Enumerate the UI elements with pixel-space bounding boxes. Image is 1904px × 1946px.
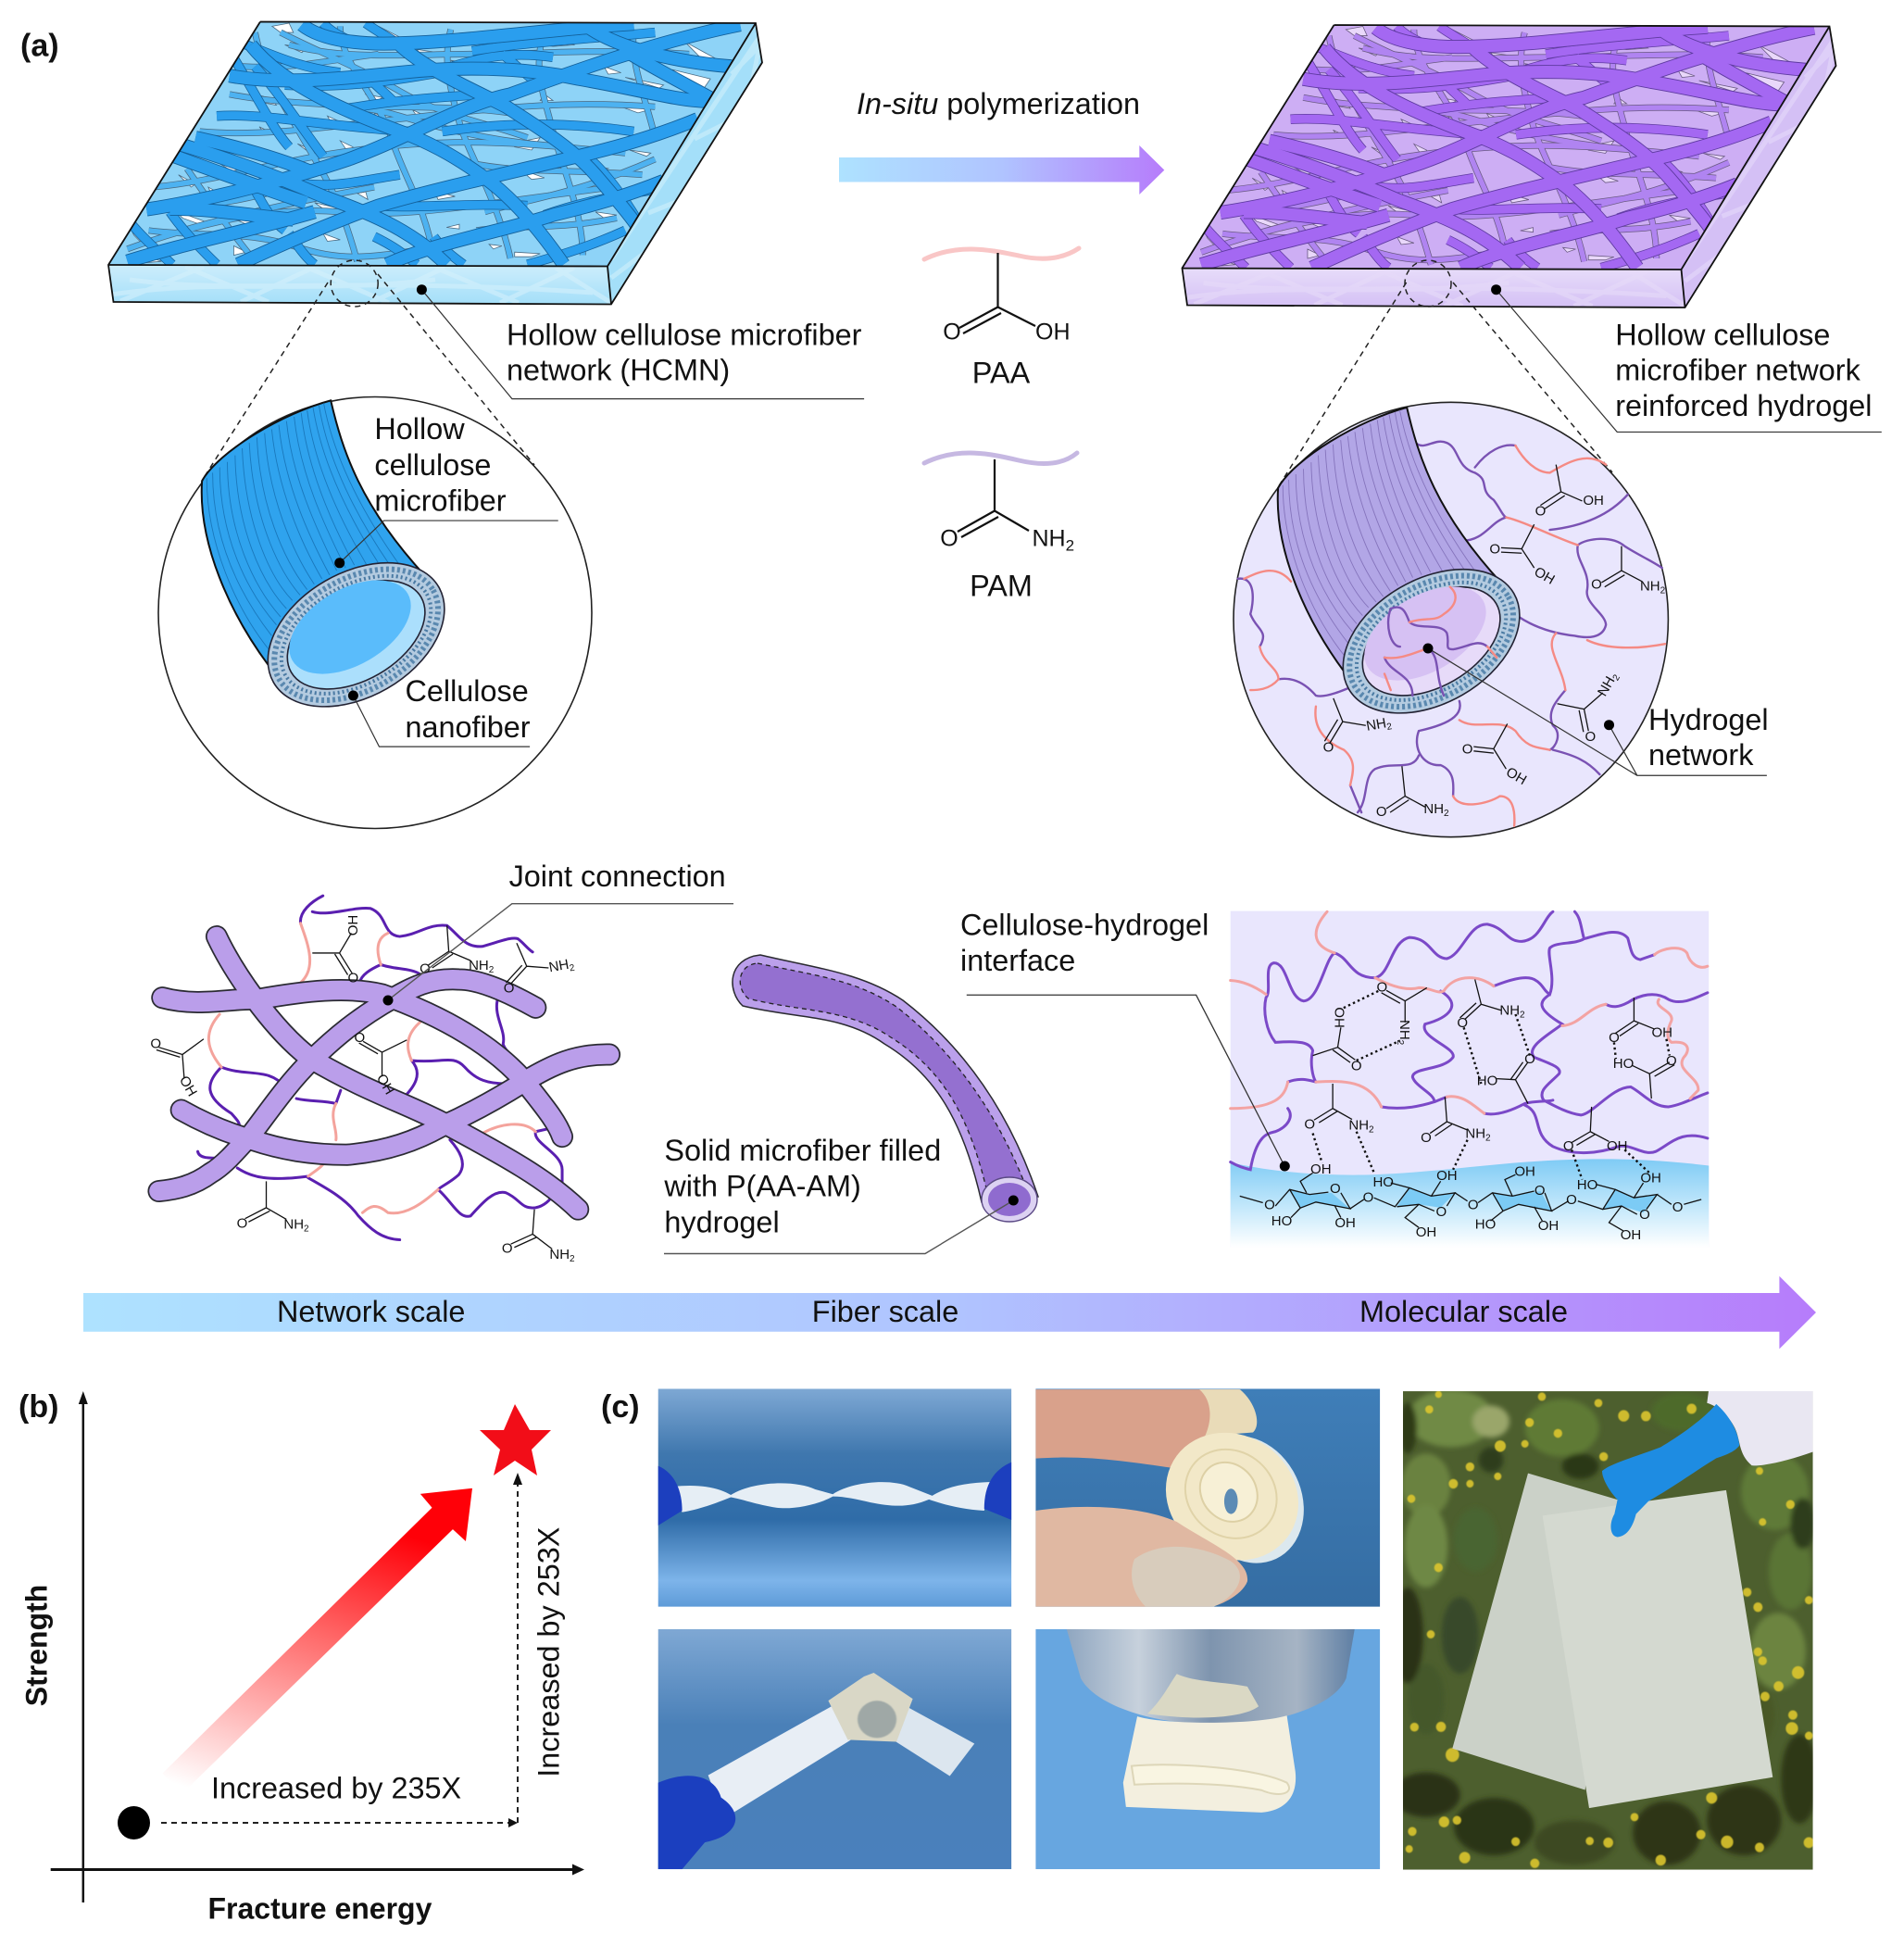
molecular labels: 2 xyxy=(1485,1134,1491,1143)
label: increased by 235X: Increased by 235X xyxy=(211,1772,461,1805)
molecular labels: O xyxy=(1376,980,1387,996)
chemical side groups: OH xyxy=(345,915,361,935)
molecular labels: O xyxy=(1351,1058,1362,1073)
chemical side groups in circle: O xyxy=(1376,804,1387,820)
molecular labels: O xyxy=(1330,1181,1341,1197)
chemical side groups in circle: O xyxy=(1585,729,1596,745)
molecular labels: HO xyxy=(1477,1073,1497,1088)
y axis xyxy=(79,1391,88,1902)
purple fibers xyxy=(158,936,609,1210)
start dot xyxy=(118,1806,150,1839)
monomer: PAM: PAM xyxy=(970,570,1033,603)
chemical side groups in circle: 2 xyxy=(1444,809,1449,819)
leader dot: HCMN xyxy=(417,284,427,295)
molecular labels: HO xyxy=(1271,1213,1292,1229)
blue slab: hollow cellulose microfiber network xyxy=(102,14,783,304)
chemical side groups: O xyxy=(420,961,431,977)
panel background xyxy=(1231,911,1709,1248)
hydrogel chains behind fibers xyxy=(198,896,562,1240)
chemical side groups in circle: NH xyxy=(1595,674,1618,699)
chemical side groups in circle: O xyxy=(1489,542,1500,558)
label: reinforced hydrogel: reinforced hydrogel xyxy=(1615,389,1872,422)
chemical side groups: O xyxy=(354,1030,365,1046)
chemical side groups xyxy=(150,915,576,1264)
photo: folded joint xyxy=(658,1629,1011,1869)
molecular labels: O xyxy=(1672,1199,1683,1215)
label: reinforced hydrogel: Hollow cellulose xyxy=(1615,319,1830,352)
magnified circle: hollow fiber xyxy=(158,396,592,828)
molecular labels: OH xyxy=(1538,1218,1559,1234)
fiber body xyxy=(1278,408,1501,672)
label: solid microfiber: Solid microfiber filled xyxy=(664,1134,941,1167)
chemical side groups: NH xyxy=(469,958,489,973)
leader dot: microfiber xyxy=(1008,1195,1019,1206)
hydrogel chains xyxy=(1231,911,1708,1170)
chemical side groups in circle: OH xyxy=(1583,493,1604,508)
cellulose backbone xyxy=(1240,1173,1701,1231)
monomer: PAA xyxy=(924,248,1079,390)
molecular labels: HO xyxy=(1332,1007,1348,1028)
monomer: PAA: PAA xyxy=(972,357,1031,390)
molecular labels: OH xyxy=(1514,1164,1535,1180)
label: cellulose-hydrogel interface: interface xyxy=(960,944,1075,977)
label: fiber scale: Fiber scale xyxy=(812,1295,958,1328)
chemical side groups: OH xyxy=(176,1073,200,1099)
chemical side groups in circle: NH xyxy=(1640,578,1660,595)
molecular labels: O xyxy=(1566,1192,1577,1208)
chemical side groups: NH xyxy=(283,1217,304,1233)
microfiber end core xyxy=(988,1183,1031,1216)
leader: joint connection xyxy=(388,904,733,1000)
chemical side groups: NH xyxy=(549,1247,570,1262)
molecular labels: O xyxy=(1457,1015,1468,1031)
purple slab: reinforced hydrogel xyxy=(1176,17,1857,308)
photo: hand holding sheets outdoors xyxy=(1392,1389,1818,1870)
glucose rings xyxy=(1290,1187,1657,1212)
leader lines: upper right xyxy=(1428,290,1882,775)
molecular labels: O xyxy=(1563,1138,1574,1154)
chemical side groups: 2 xyxy=(569,963,576,974)
molecular labels: OH xyxy=(1334,1215,1356,1231)
monomer: PAM xyxy=(924,453,1077,603)
chemical side groups in circle: 2 xyxy=(1386,722,1393,733)
chemical side groups: 2 xyxy=(304,1224,309,1235)
molecular labels: 2 xyxy=(1369,1125,1374,1136)
label: network scale: Network scale xyxy=(277,1295,465,1328)
leader dot: interface xyxy=(1280,1161,1290,1171)
monomer: PAM: O xyxy=(940,526,958,552)
label: in-situ polymerization: In-situ polymerization xyxy=(857,87,1140,120)
molecular labels: NH xyxy=(1348,1118,1369,1134)
label: hollow cellulose microfiber: cellulose xyxy=(374,448,491,482)
zoom guides: blue xyxy=(202,260,534,481)
photo: twisted ribbon xyxy=(658,1388,1011,1607)
photo: rolled sheet xyxy=(1035,1388,1380,1607)
monomer: PAA: OH xyxy=(1035,320,1071,345)
molecular labels: NH xyxy=(1465,1126,1485,1141)
molecular labels: OH xyxy=(1621,1227,1641,1243)
label: hollow cellulose microfiber: microfiber xyxy=(374,483,507,517)
microfiber end cap xyxy=(982,1177,1037,1222)
label: (a): (a) xyxy=(20,28,59,63)
molecular labels: OH xyxy=(1651,1025,1672,1041)
label: cellulose nanofiber: nanofiber xyxy=(406,710,531,744)
molecular labels: HO xyxy=(1372,1174,1394,1190)
monomer: PAM: NH xyxy=(1032,526,1066,552)
molecular labels: O xyxy=(1666,1053,1677,1069)
chemical side groups in circle: NH xyxy=(1365,715,1387,734)
circle outline xyxy=(1234,402,1668,837)
molecular labels: O xyxy=(1639,1207,1650,1223)
label: HCMN: network (HCMN) xyxy=(507,354,730,387)
molecular labels: OH xyxy=(1607,1138,1627,1154)
arrow: polymerization xyxy=(839,145,1164,195)
monomer: PAM: 2 xyxy=(1066,537,1074,555)
molecular labels: HO xyxy=(1613,1056,1634,1072)
label: reinforced hydrogel: microfiber network xyxy=(1615,354,1861,387)
molecular labels: OH xyxy=(1416,1224,1436,1240)
label: joint connection: Joint connection xyxy=(509,860,726,893)
x axis xyxy=(51,1864,584,1875)
chemical side groups: 2 xyxy=(570,1254,575,1264)
molecular labels: O xyxy=(1421,1130,1432,1146)
leader dot: joint xyxy=(383,995,393,1006)
chemical side groups in circle: NH xyxy=(1423,801,1444,817)
chemical side groups: O xyxy=(347,971,358,986)
chemical side groups in circle: O xyxy=(1462,741,1472,758)
molecular labels: O xyxy=(1468,1197,1479,1212)
chemical side groups: OH xyxy=(373,1072,397,1098)
chemical side groups: O xyxy=(150,1036,161,1051)
leader: cellulose-hydrogel interface xyxy=(967,995,1284,1166)
leader lines: upper left xyxy=(340,290,864,747)
magnified circle: hydrogel reinforced fiber xyxy=(1234,402,1668,837)
molecular labels: OH xyxy=(1310,1161,1332,1177)
monomer: PAA: O xyxy=(943,320,961,345)
label: solid microfiber: hydrogel xyxy=(664,1206,780,1239)
axis label: strength: Strength xyxy=(20,1585,54,1706)
label: cellulose nanofiber: Cellulose xyxy=(406,674,529,708)
molecular labels: NH xyxy=(1499,1003,1520,1019)
label: hollow cellulose microfiber: Hollow xyxy=(374,412,465,446)
label: (b): (b) xyxy=(19,1389,58,1425)
molecular labels: O xyxy=(1435,1204,1447,1220)
molecular labels: 2 xyxy=(1395,1040,1405,1046)
chemical side groups in circle: O xyxy=(1591,577,1602,593)
leader dot: hollow microfiber xyxy=(334,558,344,568)
panel (a): network and scales xyxy=(20,14,1882,1349)
leader: solid microfiber xyxy=(664,1200,1013,1254)
molecular labels: O xyxy=(1524,1051,1535,1067)
molecular labels: O xyxy=(1609,1030,1620,1046)
dashed horizontal arrow xyxy=(161,1818,518,1827)
molecular labels: HO xyxy=(1577,1177,1597,1193)
chemical side groups in circle: O xyxy=(1323,740,1334,756)
microfiber hydrogel core xyxy=(740,963,1030,1200)
molecular labels xyxy=(1264,980,1683,1243)
chemical side groups: O xyxy=(504,980,514,996)
fiber cross-section xyxy=(1318,540,1545,743)
chemical side groups in circle: 2 xyxy=(1611,672,1622,683)
molecular labels: OH xyxy=(1640,1171,1661,1186)
microfiber sheath xyxy=(733,955,1038,1202)
molecular labels: 2 xyxy=(1520,1011,1525,1021)
chemical side groups in circle xyxy=(1323,465,1666,820)
network-scale illustration xyxy=(150,896,609,1264)
photo: weight on folded sheet xyxy=(1035,1629,1380,1869)
leader dot: lumen hydrogel xyxy=(1422,643,1434,654)
molecular interface panel xyxy=(1231,911,1709,1248)
zoom guides: purple xyxy=(1275,260,1612,492)
chemical side groups in circle: O xyxy=(1535,504,1546,519)
chemical side groups: O xyxy=(237,1216,247,1232)
scale arrow xyxy=(83,1276,1816,1349)
label: hydrogel network: network xyxy=(1648,738,1754,772)
molecular labels: OH xyxy=(1436,1168,1458,1184)
molecular labels: O xyxy=(1534,1183,1546,1199)
hollow fiber body xyxy=(202,400,425,666)
leader dot: hydrogel network xyxy=(1604,720,1614,730)
cellulose wave xyxy=(1231,1159,1709,1248)
chemical side groups: NH xyxy=(547,957,570,975)
chemical side groups in circle: 2 xyxy=(1660,585,1666,596)
chemical side groups: 2 xyxy=(489,965,495,975)
circle outline xyxy=(158,396,592,828)
leader dot: cellulose nanofiber xyxy=(348,691,358,700)
hollow fiber cross-section xyxy=(243,534,470,736)
leader dot: reinforced hydrogel xyxy=(1491,284,1501,295)
label: cellulose-hydrogel interface: Cellulose-hydrogel xyxy=(960,908,1209,941)
panel (c): photographs xyxy=(601,1388,1818,1870)
label: hydrogel network: Hydrogel xyxy=(1648,703,1769,736)
label: HCMN: Hollow cellulose microfiber xyxy=(507,319,861,352)
label: molecular scale: Molecular scale xyxy=(1359,1295,1568,1328)
star xyxy=(480,1404,551,1475)
hydrogen bonds xyxy=(1313,991,1670,1180)
chemical side groups in circle: OH xyxy=(1532,564,1558,588)
molecular labels: O xyxy=(1264,1197,1275,1212)
molecular labels: NH xyxy=(1397,1020,1412,1040)
molecular labels: HO xyxy=(1475,1217,1496,1233)
dashed vertical arrow xyxy=(513,1473,522,1823)
molecular labels: O xyxy=(1304,1117,1315,1132)
red gradient arrow xyxy=(162,1488,472,1794)
hydrogel filling fiber lumen xyxy=(1384,587,1497,696)
label: (c): (c) xyxy=(601,1389,640,1425)
chemical side groups in circle: OH xyxy=(1503,764,1529,788)
label: solid microfiber: with P(AA-AM) xyxy=(663,1169,861,1202)
side-group bonds xyxy=(1313,979,1674,1145)
axis label: fracture energy: Fracture energy xyxy=(207,1892,432,1926)
label: increased by 253X: Increased by 253X xyxy=(532,1527,565,1777)
panel (b): strength vs fracture energy xyxy=(19,1389,584,1926)
molecular labels: O xyxy=(1363,1189,1373,1206)
solid microfiber xyxy=(733,955,1038,1222)
chemical side groups: O xyxy=(502,1240,513,1256)
hydrogel chains xyxy=(1238,442,1665,826)
